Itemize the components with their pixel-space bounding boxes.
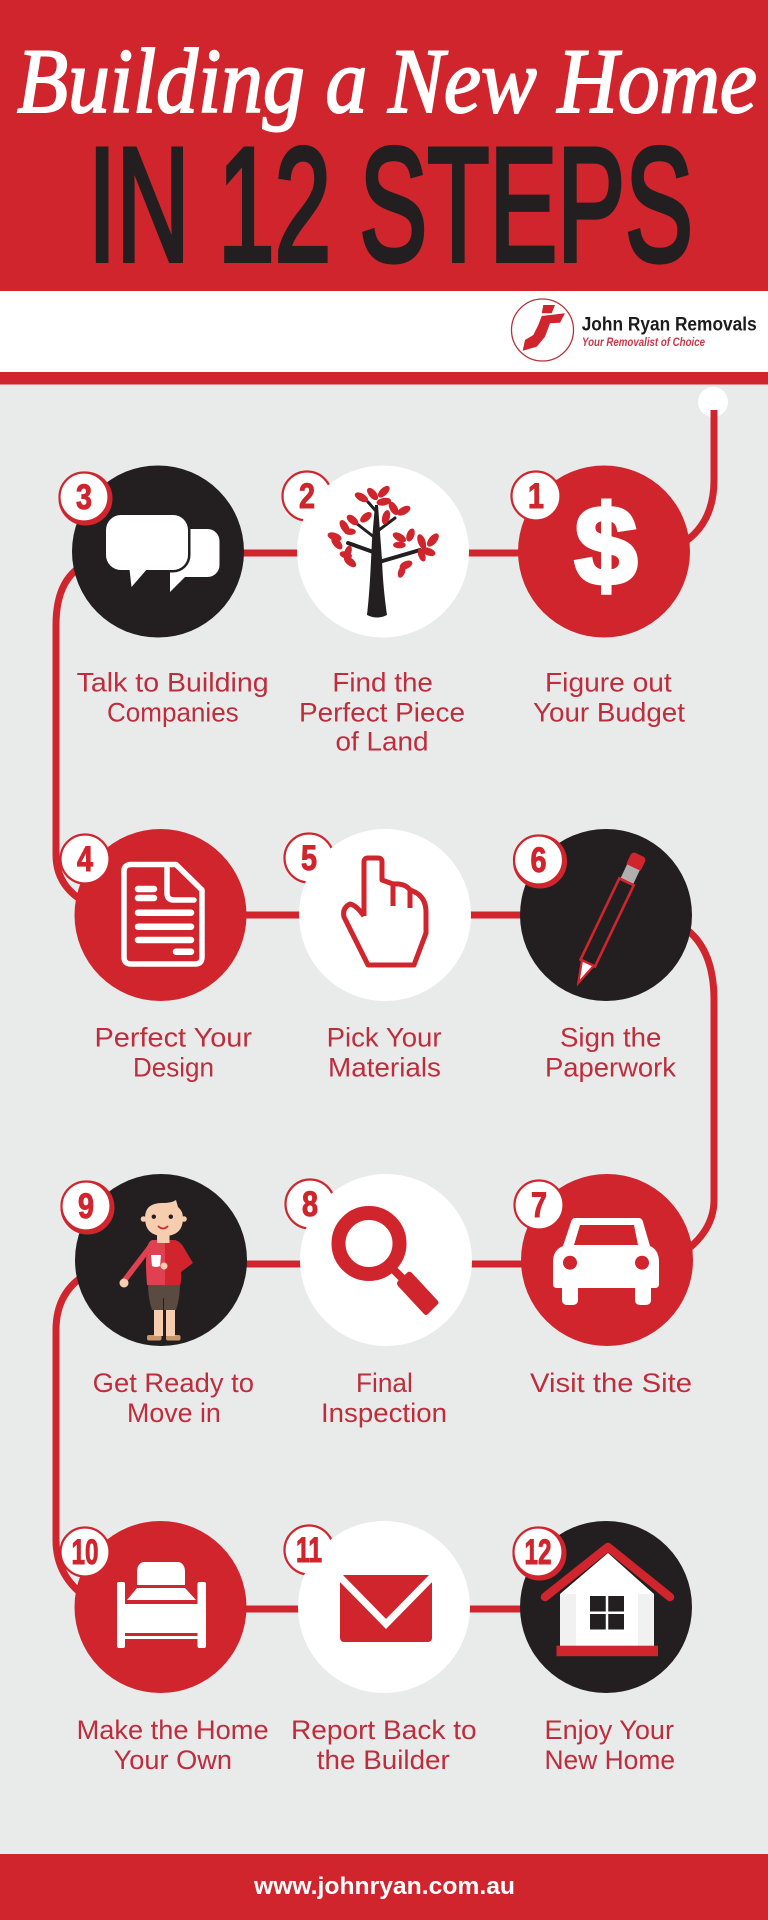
- label: Pick Your: [327, 1023, 442, 1053]
- label: [327, 1023, 442, 1083]
- label: Materials: [328, 1053, 441, 1083]
- badge 9: [62, 1182, 112, 1232]
- label: Get Ready to: [93, 1368, 254, 1398]
- label: Final: [356, 1368, 413, 1398]
- step 6: Sign the Paperwork: [514, 829, 692, 1083]
- label: Your Budget: [533, 698, 686, 728]
- label: the Builder: [317, 1745, 450, 1775]
- step 5: Pick Your Materials: [284, 829, 471, 1083]
- icon: tree: [327, 485, 440, 618]
- badge 1: 1: [528, 477, 544, 516]
- icon: car: [553, 1218, 659, 1305]
- badge 4: [60, 834, 110, 884]
- connector path between steps: [56, 387, 728, 1609]
- badge 3: 3: [76, 478, 92, 517]
- badge 6: [514, 836, 565, 886]
- label: Perfect Your: [94, 1023, 252, 1053]
- badge 4: 4: [77, 840, 93, 879]
- icon: envelope: [337, 1574, 435, 1642]
- step 4: Perfect Your Design: [60, 829, 252, 1083]
- panel: title header: [0, 0, 768, 296]
- badge 3: [60, 472, 110, 524]
- label: [93, 1368, 254, 1428]
- logo tagline: Your Removalist of Choice: [582, 337, 706, 349]
- icon: magnifying glass: [338, 1213, 438, 1315]
- label: Report Back to: [291, 1715, 477, 1745]
- badge 6: 6: [530, 841, 546, 880]
- icon: document: [124, 864, 202, 964]
- badge 8: 8: [302, 1185, 318, 1224]
- label: Perfect Piece: [299, 698, 465, 728]
- label: Move in: [127, 1398, 221, 1428]
- label: Enjoy Your: [544, 1715, 674, 1745]
- label: [94, 1023, 252, 1083]
- panel: logo strip: [0, 291, 768, 384]
- step 12: Enjoy Your New Home: [514, 1521, 692, 1775]
- label: Make the Home: [77, 1715, 269, 1745]
- label: Your Own: [114, 1745, 232, 1775]
- icon: dollar sign: $: [575, 483, 637, 608]
- icon: house: [545, 1547, 670, 1656]
- badge 12: 12: [524, 1533, 552, 1572]
- label: Companies: [107, 698, 239, 728]
- icon: person holding a mug: [120, 1200, 193, 1340]
- label: [299, 668, 465, 757]
- label: Figure out: [545, 668, 672, 698]
- badge 10: [60, 1528, 110, 1576]
- label: [545, 1023, 677, 1083]
- badge 2: 2: [299, 477, 315, 516]
- label: Design: [133, 1053, 214, 1083]
- step 1: Figure out Your Budget: [512, 466, 690, 728]
- badge 9: 9: [78, 1187, 94, 1226]
- icon: bed: [117, 1562, 206, 1648]
- badge 10: 10: [72, 1533, 98, 1572]
- label: [544, 1715, 675, 1775]
- icon: pointing hand: [344, 858, 426, 965]
- label: [321, 1368, 447, 1428]
- label: Paperwork: [545, 1053, 677, 1083]
- step 3: Talk to Building Companies: [60, 466, 269, 728]
- label: Sign the: [560, 1023, 661, 1053]
- label: Inspection: [321, 1398, 447, 1428]
- step 2: Find the Perfect Piece of Land: [282, 466, 469, 757]
- icon: speech bubbles: [106, 515, 220, 592]
- footer bar: [0, 1854, 768, 1920]
- website address: www.johnryan.com.au: [253, 1873, 515, 1900]
- step 9: Get Ready to Move in: [62, 1174, 254, 1428]
- step 11: Report Back to the Builder: [284, 1521, 477, 1775]
- badge 1: [512, 472, 560, 520]
- label: Talk to Building: [77, 668, 269, 698]
- label: [533, 668, 686, 728]
- step 7: Visit the Site: [514, 1174, 693, 1398]
- label: Visit the Site: [530, 1368, 692, 1398]
- step 10: Make the Home Your Own: [60, 1521, 269, 1775]
- badge 11: 11: [296, 1531, 322, 1570]
- badge 5: 5: [301, 839, 317, 878]
- label: of Land: [336, 727, 428, 757]
- badge 12: [514, 1528, 564, 1578]
- icon: pencil: [571, 851, 647, 986]
- label: Find the: [332, 668, 433, 698]
- icon: John Ryan logo: [512, 299, 574, 361]
- badge 7: [514, 1180, 564, 1230]
- badge 7: 7: [531, 1186, 547, 1225]
- label: New Home: [544, 1745, 675, 1775]
- step 8: Final Inspection: [286, 1174, 472, 1428]
- label: [291, 1715, 477, 1775]
- label: [77, 668, 269, 728]
- label: [77, 1715, 269, 1775]
